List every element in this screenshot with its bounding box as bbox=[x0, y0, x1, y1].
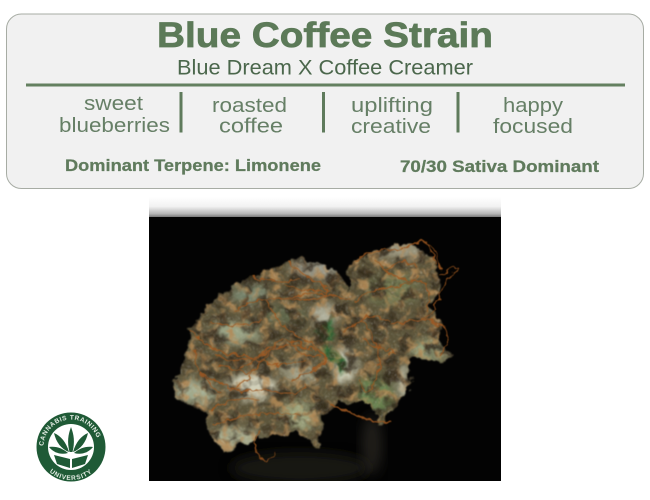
flavor column: sweet blueberries: blueberries bbox=[59, 115, 170, 137]
seal ring text: CANNABIS TRAINING bbox=[39, 415, 100, 446]
subtitle: cross: Blue Dream X Coffee Creamer bbox=[177, 56, 473, 80]
icon: cannabis leaf on book bbox=[49, 427, 93, 468]
horizontal divider bbox=[26, 84, 625, 86]
seal ring text bbox=[39, 415, 100, 480]
bud reflection bbox=[230, 415, 382, 484]
effects column: happy focused: focused bbox=[493, 116, 573, 138]
flavor column: roasted coffee: coffee bbox=[219, 116, 283, 138]
panel: strain info bbox=[6, 14, 644, 188]
bud body bbox=[172, 242, 454, 453]
effects column: uplifting creative: creative bbox=[351, 116, 431, 138]
brown and dark mottling bbox=[173, 243, 445, 452]
sativa ratio: 70/30 Sativa Dominant bbox=[400, 158, 600, 176]
column divider bbox=[322, 92, 325, 132]
flavor column: sweet blueberries bbox=[59, 93, 170, 137]
effects column: uplifting creative: uplifting bbox=[351, 95, 433, 117]
seal ring text: UNIVERSITY bbox=[50, 468, 91, 480]
column divider bbox=[180, 92, 182, 132]
flavor column: roasted coffee bbox=[212, 95, 287, 138]
green leaves bbox=[315, 315, 348, 373]
effects column: happy focused bbox=[493, 95, 573, 138]
orange pistils bbox=[190, 241, 459, 460]
dominant terpene: Dominant Terpene: Limonene bbox=[65, 157, 321, 175]
title: Blue Coffee Strain bbox=[157, 16, 493, 55]
flavor column: roasted coffee: roasted bbox=[212, 95, 287, 117]
frosted calyxes bbox=[174, 240, 450, 450]
flavor column: sweet blueberries: sweet bbox=[84, 93, 143, 115]
effects column: happy focused: happy bbox=[503, 95, 563, 117]
column divider bbox=[456, 92, 460, 132]
frost grain bbox=[174, 246, 452, 450]
effects column: uplifting creative bbox=[351, 95, 433, 138]
logo: Cannabis Training University seal bbox=[36, 412, 106, 482]
photo: cannabis bud bbox=[149, 197, 501, 484]
